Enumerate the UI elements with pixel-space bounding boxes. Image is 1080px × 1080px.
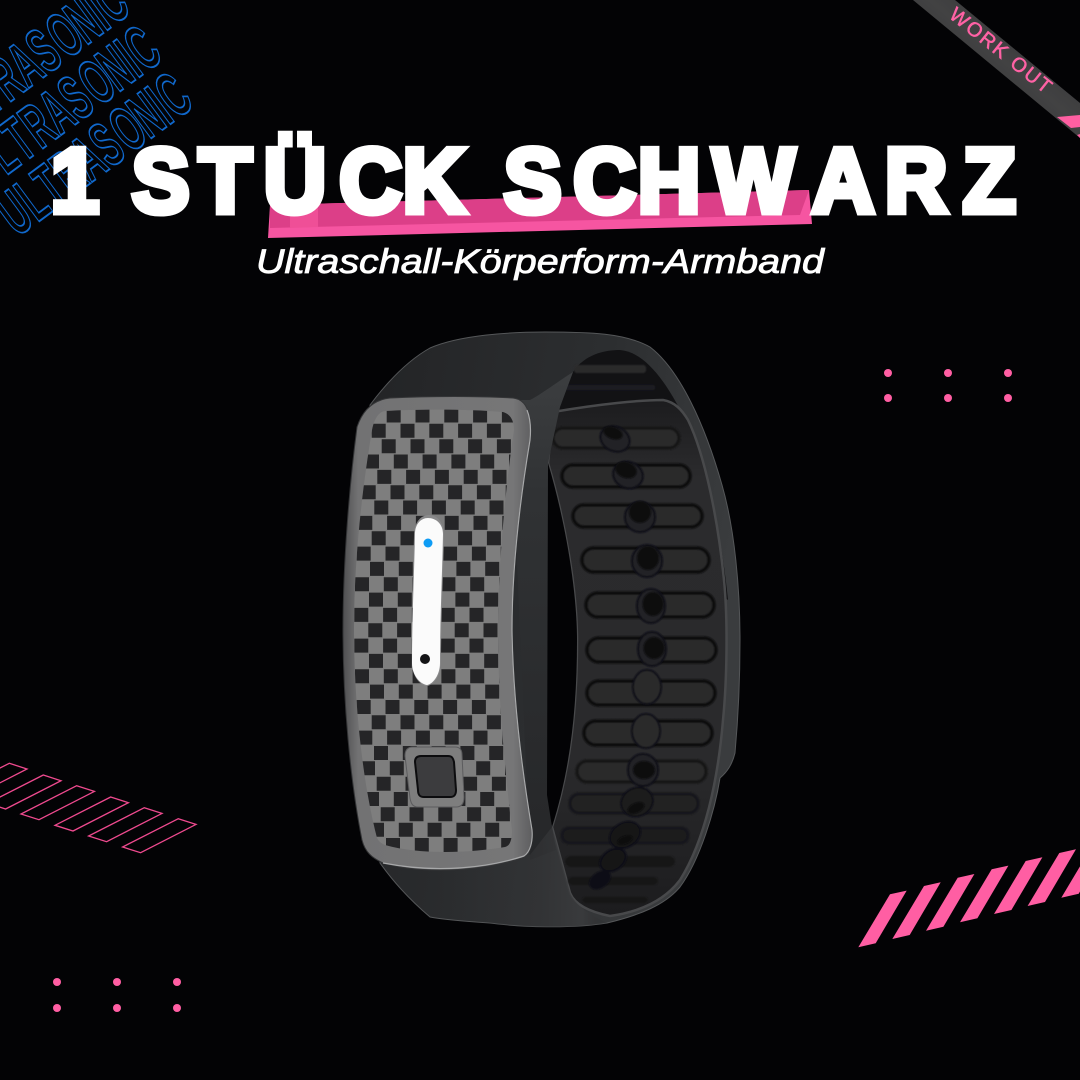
inner strap — [548, 400, 727, 916]
front band side — [510, 372, 573, 860]
bezel — [343, 396, 532, 870]
white indicator pill — [412, 515, 444, 686]
outer band — [370, 332, 740, 927]
black gap — [546, 463, 577, 827]
upper inner strap shadow — [555, 350, 728, 600]
checker panel — [354, 410, 530, 852]
strap holes and pins — [586, 422, 666, 893]
upper ribs — [565, 365, 655, 390]
dots bottom left — [53, 978, 181, 1012]
pink highlight bar behind title — [268, 190, 812, 238]
strap hole centres — [602, 424, 664, 846]
strap ribs — [553, 428, 716, 903]
work out ribbon — [913, 0, 1080, 138]
title: 1 STÜCK SCHWARZ — [51, 130, 1016, 231]
subtitle: Ultraschall-Körperform-Armband — [256, 243, 825, 281]
lower band highlight — [440, 827, 607, 927]
solid stripes right — [858, 841, 1080, 947]
work out ribbon: WORK OUT — [945, 4, 1056, 98]
outlined stripes left — [0, 763, 196, 853]
dots top right — [884, 369, 1012, 402]
square button — [405, 747, 464, 807]
bezel highlight — [383, 410, 532, 869]
wristband product — [343, 332, 740, 927]
